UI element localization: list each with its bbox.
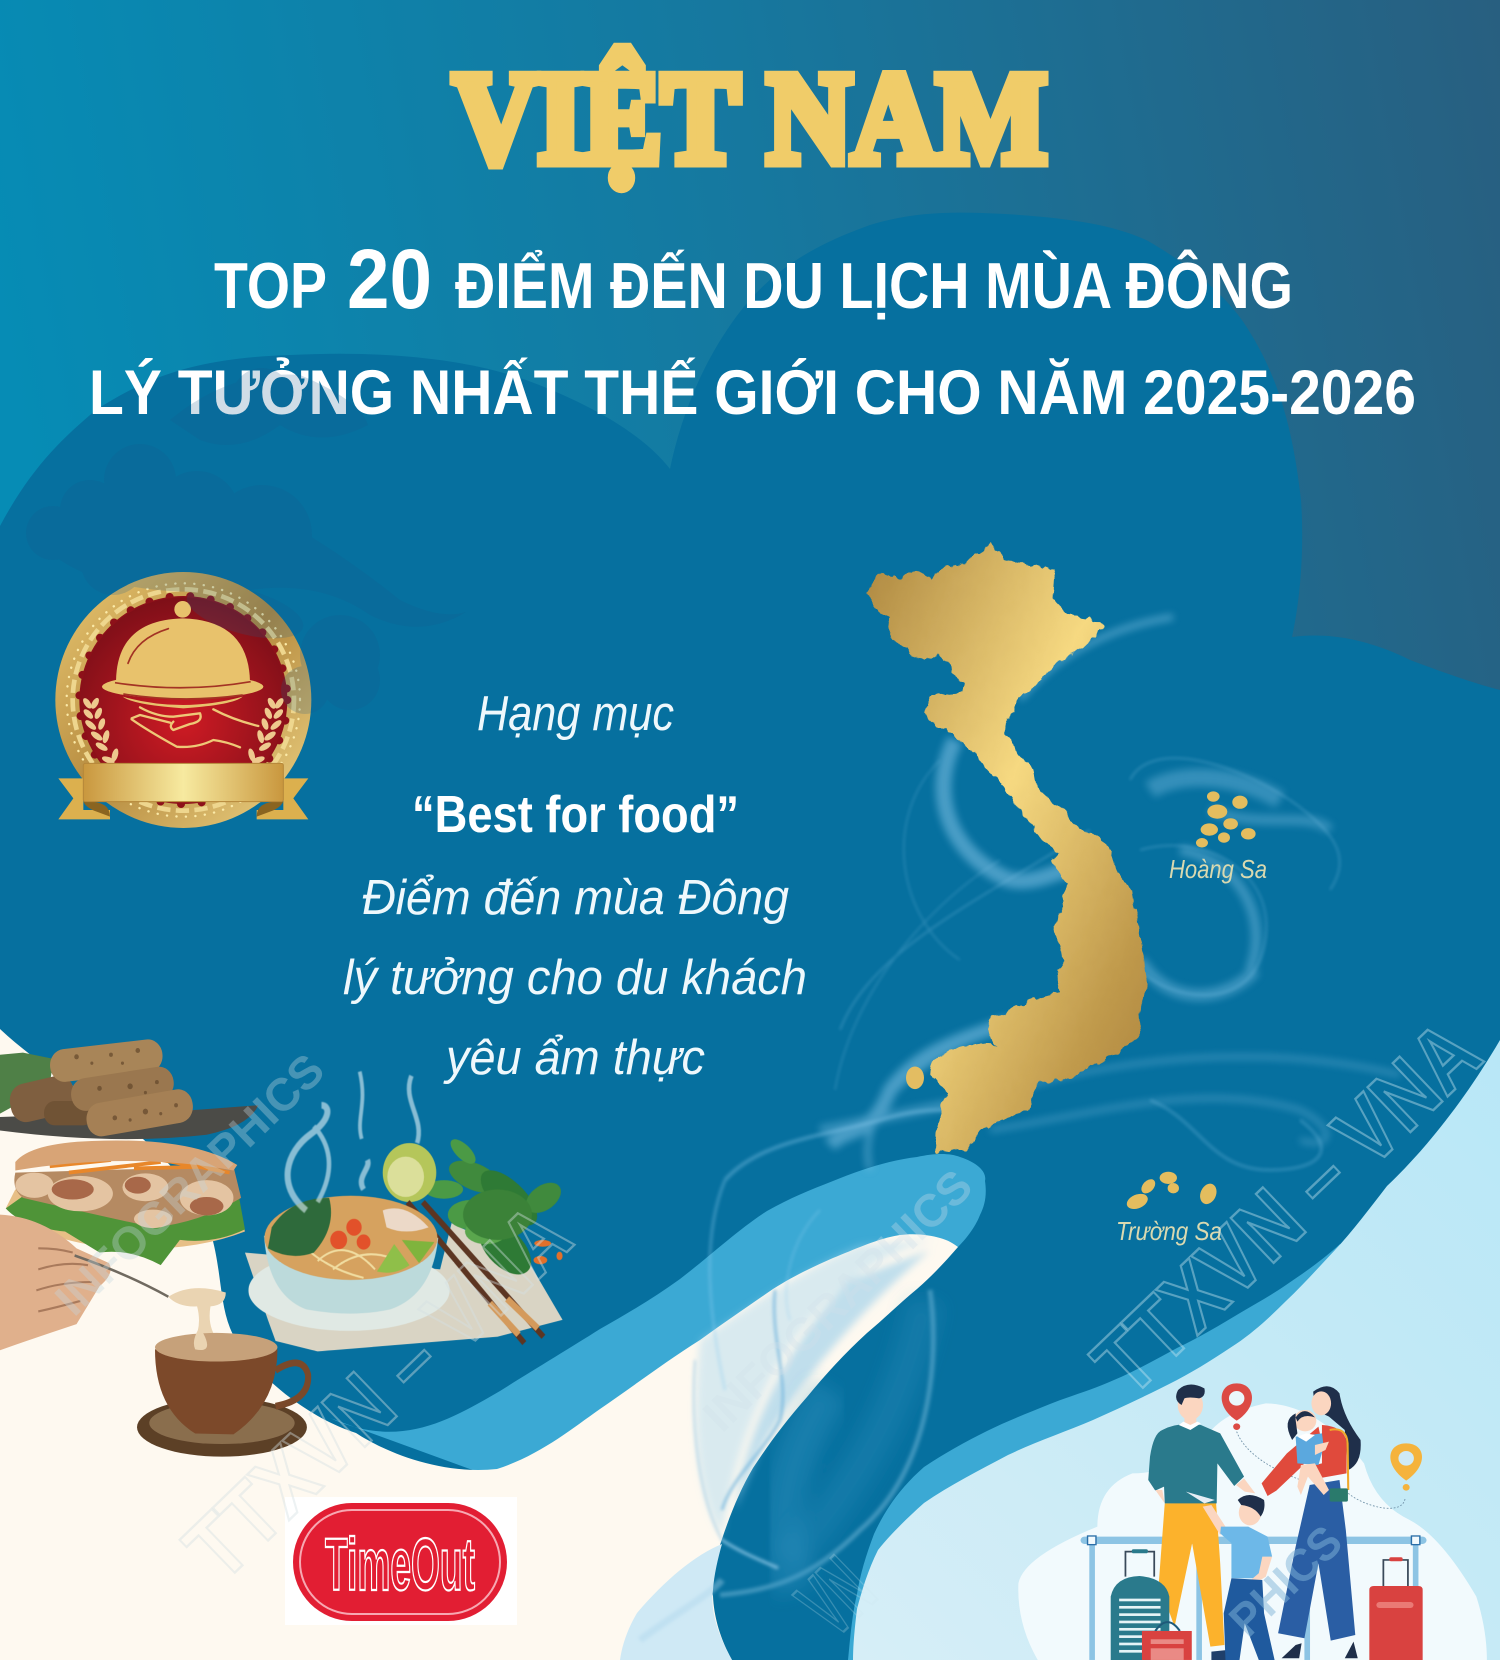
baby [1288,1410,1329,1495]
red suitcase [1369,1557,1423,1660]
lower wave: mid blue band [330,1154,986,1480]
watermark: INFOGRAPHICS: INFOGRAPHICS [693,1159,982,1441]
river smoke wisps [640,1290,933,1640]
food: spring rolls [0,1038,258,1139]
pale blue corner shape [620,1544,732,1660]
lower wave: cream area [0,1029,958,1660]
plate [248,1250,450,1331]
ribbon [58,778,110,819]
wheat left [81,697,120,765]
Hoàng Sa islands [1196,791,1256,847]
watermark: INFOGRAPHICS [45,1043,1352,1646]
lower right wave: mid blue strip [848,1244,1400,1660]
Hoàng Sa label: Hoàng Sa [1169,854,1267,884]
Trường Sa islands [1126,1172,1219,1211]
logo: Time Out [285,1497,517,1625]
watermark: INFOGRAPHICS: INFOGRAPHICS [45,1043,334,1325]
red pin [1222,1383,1252,1430]
category text block: yêu ẩm thực [443,1031,705,1085]
category text block [343,687,807,1085]
watermark: TTXVN - VNA: TTXVN – VNA [166,1186,590,1599]
white background blobs [1018,1403,1487,1660]
food: coffee cup [137,1328,308,1457]
Trường Sa label: Trường Sa [1116,1216,1222,1246]
boy [1186,1492,1275,1660]
category text block: “Best for food” [412,786,739,844]
man [1148,1385,1255,1660]
rail [1081,1537,1427,1660]
watermark: TTXVN - VNA [166,1002,1500,1654]
woman [1262,1386,1361,1658]
red bag [1142,1622,1192,1660]
heading line 1: TOP [214,249,327,322]
bowl [264,1236,438,1314]
cloche [102,601,263,708]
icon: gold food medal [55,572,311,828]
food: banh mi [6,1140,245,1265]
smoke around the map [820,617,1400,1170]
logo: Time Out: TimeOut [325,1523,475,1606]
napkin [245,1223,563,1351]
map of Vietnam [868,546,1147,1150]
category text block: lý tưởng cho du khách [343,951,807,1005]
milk drop [168,1288,226,1349]
route dots [1237,1432,1405,1508]
herbs [425,1135,566,1284]
heading line 1: ĐIỂM ĐẾN DU LỊCH MÙA ĐÔNG [455,249,1293,322]
category text block: Điểm đến mùa Đông [362,871,789,925]
chopsticks [408,1202,543,1343]
watermark: TTXVN - VNA: VN [779,1539,893,1654]
smoke ring over mid band [710,1110,1000,1390]
yellow pin [1390,1443,1422,1491]
category text block: Hạng mục [477,687,674,741]
heading line 1 [214,232,1293,326]
lower right wave: light blue area [853,1040,1500,1660]
island: Phu Quoc [906,1066,924,1089]
decorative cloud motif [26,368,466,714]
watermark: INFOGRAPHICS: PHICS [1219,1515,1352,1646]
wheat right [247,697,285,765]
serving hand [132,707,258,747]
lime [383,1143,436,1202]
family travel illustration [1018,1383,1487,1660]
food: hand with spoon [0,1215,226,1350]
teal suitcase [1111,1549,1169,1660]
food: pho bowl [245,1135,566,1351]
steam above the bowl [288,1072,419,1210]
heading line 1: 20 [347,232,432,326]
smoke wash over cream [696,1240,935,1535]
title: VIỆT NAM: VIỆT NAM [453,46,1047,191]
